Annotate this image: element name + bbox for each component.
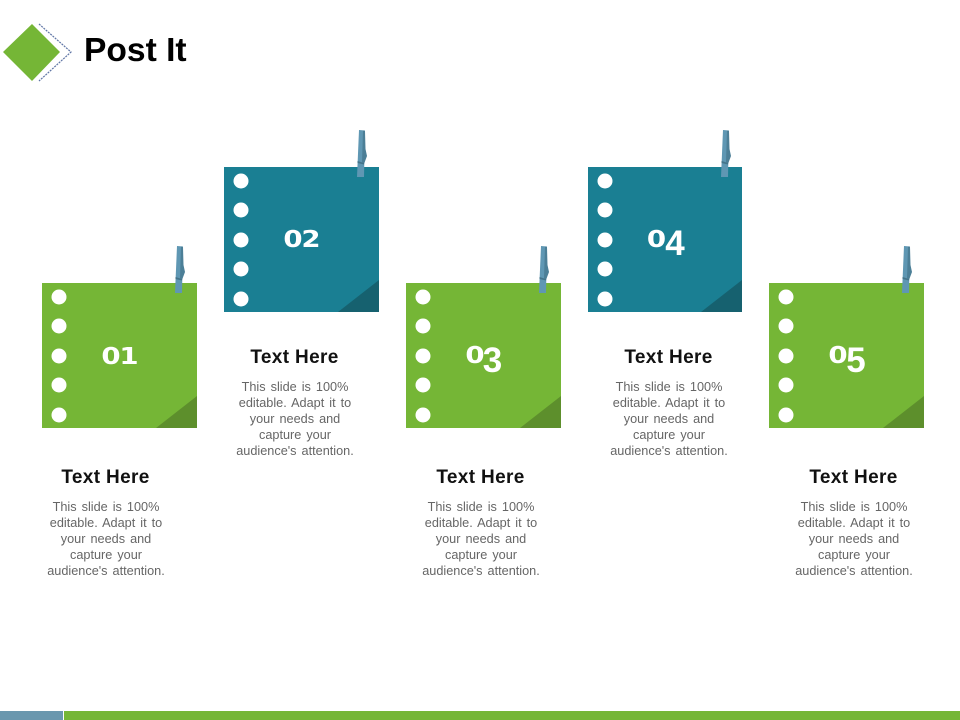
title: Post It bbox=[84, 32, 187, 69]
text block 01 bbox=[47, 467, 165, 578]
text block 02: This slide is 100% bbox=[242, 380, 348, 394]
text block 04: Text Here bbox=[624, 347, 713, 368]
panel: note 03: 0 bbox=[465, 341, 485, 368]
text block 05: audience's attention. bbox=[795, 564, 913, 578]
text block 04: audience's attention. bbox=[610, 444, 728, 458]
panel: note 03: 3 bbox=[483, 341, 502, 380]
text block 03: capture your bbox=[445, 548, 518, 562]
text block 01: audience's attention. bbox=[47, 564, 165, 578]
text block 05 bbox=[795, 467, 913, 578]
text block 02: audience's attention. bbox=[236, 444, 354, 458]
text block 01: Text Here bbox=[61, 467, 150, 488]
panel: note 05 bbox=[769, 246, 924, 428]
text block 01: editable. Adapt it to bbox=[50, 516, 162, 530]
text block 02 bbox=[236, 347, 354, 458]
text block 03: This slide is 100% bbox=[428, 500, 534, 514]
text block 03: your needs and bbox=[436, 532, 526, 546]
text block 04 bbox=[610, 347, 728, 458]
panel: note 01: 1 bbox=[119, 342, 139, 369]
panel: note 02: 0 bbox=[283, 225, 303, 252]
panel: note 04: 0 bbox=[647, 225, 666, 252]
text block 05: editable. Adapt it to bbox=[798, 516, 910, 530]
panel: note 04 bbox=[588, 130, 742, 312]
text block 02: capture your bbox=[259, 428, 332, 442]
panel: note 04: 4 bbox=[665, 224, 685, 263]
panel: note 01: 0 bbox=[101, 342, 121, 369]
text block 03: editable. Adapt it to bbox=[425, 516, 537, 530]
text block 01: your needs and bbox=[61, 532, 151, 546]
panel: note 03 bbox=[406, 246, 561, 428]
panel: note 02 bbox=[224, 130, 379, 312]
panel: note 05: 5 bbox=[846, 341, 866, 380]
text block 05: your needs and bbox=[809, 532, 899, 546]
text block 04: capture your bbox=[633, 428, 706, 442]
text block 04: editable. Adapt it to bbox=[613, 396, 725, 410]
text block 02: Text Here bbox=[250, 347, 339, 368]
text block 02: editable. Adapt it to bbox=[239, 396, 351, 410]
text block 03: Text Here bbox=[436, 467, 525, 488]
text block 05: capture your bbox=[818, 548, 891, 562]
footer bar bbox=[0, 711, 960, 720]
text block 01: This slide is 100% bbox=[53, 500, 159, 514]
icon: title diamond bbox=[3, 24, 71, 81]
panel: note 02: 2 bbox=[301, 225, 321, 252]
text block 04: This slide is 100% bbox=[616, 380, 722, 394]
panel: note 01 bbox=[42, 246, 197, 428]
text block 03: audience's attention. bbox=[422, 564, 540, 578]
text block 03 bbox=[422, 467, 540, 578]
text block 02: your needs and bbox=[250, 412, 340, 426]
text block 04: your needs and bbox=[624, 412, 714, 426]
panel: note 05: 0 bbox=[828, 341, 848, 368]
text block 01: capture your bbox=[70, 548, 143, 562]
text block 05: This slide is 100% bbox=[801, 500, 907, 514]
text block 05: Text Here bbox=[809, 467, 898, 488]
